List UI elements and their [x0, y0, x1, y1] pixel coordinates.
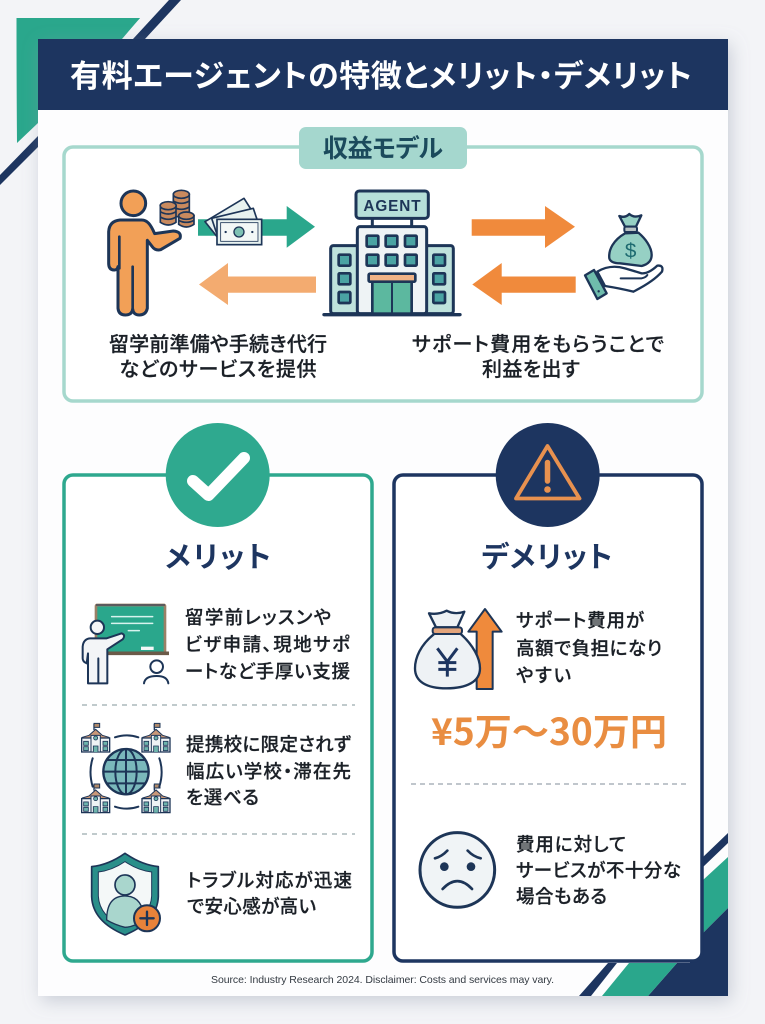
icon: agent building [324, 191, 460, 315]
icon: agent building: AGENT [363, 198, 421, 215]
text: demerit 2: サービスが不十分な [516, 857, 681, 883]
source note: Source: Industry Research 2024. Disclaimer: Costs and services may vary. [211, 974, 554, 986]
title bar [38, 39, 728, 110]
text: merit 3: で安心感が高い [187, 893, 316, 919]
text: merit 2 [186, 731, 351, 810]
section label: 収益モデル [323, 129, 443, 165]
icon: warning badge [496, 423, 600, 527]
text: demerit 1 [515, 607, 662, 688]
icon: yen bag with rising arrow [415, 609, 502, 689]
text: demerit 1: サポート費用が [516, 607, 645, 633]
panel: demerits [394, 423, 702, 961]
price range: ¥5万〜30万円 [431, 702, 667, 756]
text: merit 1: 留学前レッスンや [185, 604, 331, 630]
icon: person with coins [109, 190, 194, 315]
text: merit 3: トラブル対応が迅速 [187, 867, 352, 893]
caption: right: サポート費用をもらうことで [412, 328, 664, 357]
text: merit 1: ートなど手厚い支援 [185, 658, 350, 684]
text: demerit 1: 高額で負担になり [516, 635, 662, 661]
arrow: orange right arrow [472, 206, 575, 248]
caption: right [412, 328, 664, 382]
icon: money bag on hand: $ [625, 239, 637, 262]
arrow: peach left arrow [199, 263, 316, 305]
icon: banknotes [205, 198, 262, 245]
text: merit 2: を選べる [186, 784, 259, 810]
title bar: 有料エージェントの特徴とメリット・デメリット [70, 51, 692, 96]
caption: left [109, 328, 327, 382]
text: demerit 1: やすい [515, 662, 571, 688]
text: merit 2: 提携校に限定されず [186, 731, 351, 757]
panel: merits [64, 423, 372, 961]
icon: money bag on hand [585, 214, 662, 299]
heading: merits: メリット [165, 534, 271, 576]
bottom-right decoration [579, 833, 728, 996]
caption: left: 留学前準備や手続き代行 [109, 328, 327, 357]
icon: globe and schools [82, 723, 170, 813]
top-left decoration [0, 0, 181, 185]
arrow: orange left arrow [472, 263, 576, 305]
icon: sad face [420, 833, 495, 907]
section label [299, 127, 467, 169]
text: merit 2: 幅広い学校・滞在先 [186, 758, 351, 784]
caption: left: などのサービスを提供 [120, 353, 316, 382]
text: demerit 2 [516, 831, 681, 909]
text: demerit 2: 費用に対して [516, 831, 626, 857]
icon: check badge [166, 423, 270, 527]
icon: teacher and blackboard [83, 605, 169, 683]
arrow: teal right arrow [198, 206, 315, 248]
panel: revenue model [64, 127, 702, 401]
text: demerit 2: 場合もある [516, 883, 607, 909]
text: merit 3 [187, 867, 352, 919]
text: merit 1 [185, 604, 350, 684]
heading: demerits: デメリット [482, 534, 612, 576]
icon: shield with person [92, 853, 160, 935]
text: merit 1: ビザ申請、現地サポ [185, 631, 350, 657]
caption: right: 利益を出す [482, 353, 580, 382]
